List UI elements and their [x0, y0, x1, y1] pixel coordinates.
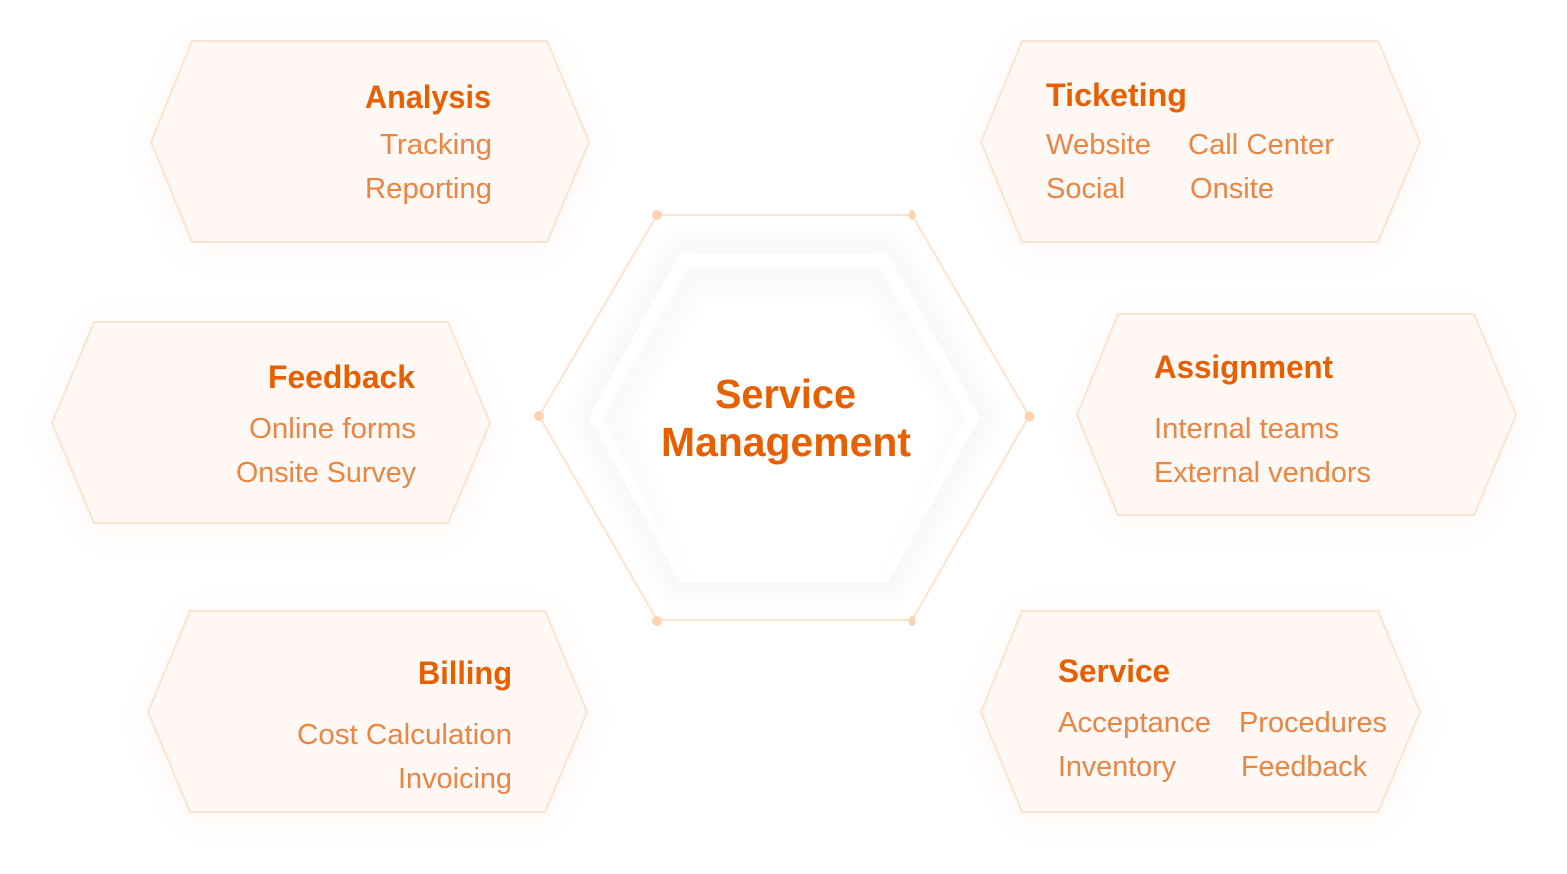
node dots [534, 210, 1034, 626]
soft grey inner hexagon [602, 267, 966, 600]
center title: Service [715, 371, 856, 417]
text: tracking: Tracking [380, 129, 492, 161]
panel: billing [148, 611, 587, 812]
text: onsite: Onsite [1190, 173, 1274, 205]
panel: assignment [1077, 314, 1516, 515]
text: procedures: Procedures [1239, 707, 1387, 739]
text: onsite survey: Onsite Survey [236, 457, 416, 489]
heading: analysis: Analysis [365, 79, 491, 115]
text: call center: Call Center [1188, 129, 1334, 161]
heading: assignment: Assignment [1154, 349, 1333, 385]
panel: feedback [52, 322, 490, 523]
outer hexagon outline [539, 215, 1029, 620]
text: invoicing: Invoicing [398, 763, 512, 795]
text: website: Website [1046, 129, 1151, 161]
text: cost calculation: Cost Calculation [297, 719, 512, 751]
heading: ticketing: Ticketing [1046, 77, 1187, 113]
text: acceptance: Acceptance [1058, 707, 1211, 739]
panel: analysis [151, 41, 589, 242]
text: external vendors: External vendors [1154, 457, 1371, 489]
central hexagon: service management [534, 210, 1034, 626]
text: online forms: Online forms [249, 413, 416, 445]
panel: ticketing [981, 41, 1420, 242]
heading: billing: Billing [418, 655, 512, 691]
text: internal teams: Internal teams [1154, 413, 1339, 445]
heading: feedback: Feedback [268, 359, 415, 395]
text: inventory: Inventory [1058, 751, 1176, 783]
white inner hexagon [589, 253, 980, 582]
center title [661, 371, 911, 465]
text: reporting: Reporting [365, 173, 492, 205]
heading: service: Service [1058, 653, 1170, 689]
text: social: Social [1046, 173, 1125, 205]
center title: Management [661, 419, 911, 465]
panel: service [981, 611, 1420, 812]
text: feedback: Feedback [1241, 751, 1367, 783]
